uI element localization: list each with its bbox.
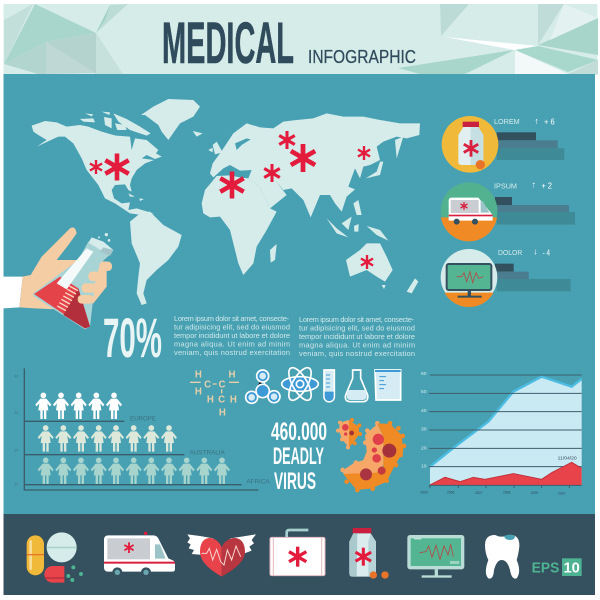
stat: ipsum: + 2 xyxy=(541,181,552,191)
flask liquid xyxy=(34,277,90,328)
text block 1: magna aliqua. Ut enim ad minim xyxy=(174,340,290,348)
map: South America xyxy=(130,212,182,305)
bottom icon bar xyxy=(4,514,595,595)
icon: chemical formula: H xyxy=(219,408,226,419)
map: Africa xyxy=(202,175,277,275)
text block 1: tur adipisicing elit, sed do eiusmod xyxy=(174,322,290,332)
flask cap xyxy=(88,237,113,256)
text block 1: tempor incididunt ut labore et dolore xyxy=(174,331,290,340)
flask highlight xyxy=(57,248,93,289)
flask body xyxy=(33,242,112,329)
icon: virus cells xyxy=(336,418,406,492)
bubbles xyxy=(105,233,108,236)
virus headline: VIRUS xyxy=(274,468,316,495)
icon: ambulance xyxy=(104,532,175,577)
grid lines xyxy=(429,375,582,467)
badge: EPS 10: 10 xyxy=(564,560,580,576)
y axis labels: 20 xyxy=(421,446,427,452)
y axis labels: 60 xyxy=(421,371,427,377)
icon: test tube xyxy=(324,370,334,402)
row: Australia people xyxy=(38,425,177,452)
text block 2: Lorem ipsum dolor sit amet, consecte- xyxy=(299,315,415,324)
stat: dolor: ↓ xyxy=(533,246,538,256)
y axis labels: 10 xyxy=(421,464,427,470)
x axis labels: 2006 xyxy=(447,491,455,495)
region labels: EUROPE xyxy=(130,416,157,423)
map: the Americas and Greenland xyxy=(32,99,223,216)
baseline xyxy=(429,485,582,488)
text block 1: veniam, quis nostrud exercitation xyxy=(174,348,290,357)
text block 1: Lorem ipsum dolor sit amet, consecte- xyxy=(174,314,290,323)
subtitle: INFOGRAPHIC: INFOGRAPHIC xyxy=(308,47,416,67)
text block 2: veniam, quis nostrud exercitation xyxy=(299,349,415,358)
icon: atom xyxy=(282,364,318,404)
map: Greenland xyxy=(141,99,200,140)
icon: chemical formula: C xyxy=(218,395,225,406)
x axis labels: 2007 xyxy=(475,491,483,495)
science icons row xyxy=(190,364,401,419)
row: Europe people xyxy=(35,392,122,419)
virus headline: 460.000 xyxy=(271,418,327,446)
axis labels xyxy=(14,374,18,486)
x axis labels: 2010 xyxy=(558,491,566,495)
people bar chart xyxy=(14,368,270,491)
map markers: red asterisks xyxy=(89,131,374,269)
large virus cell xyxy=(340,421,406,492)
axes and rows xyxy=(24,368,258,491)
icon: winged heart xyxy=(187,534,256,577)
map: Baltic sea xyxy=(235,138,251,150)
text block 2: tur adipisicing elit, sed do eiusmod xyxy=(299,324,415,332)
icon: medicine bottle xyxy=(349,528,389,579)
x axis labels: 2005 xyxy=(420,491,428,495)
small virus cell xyxy=(336,418,362,449)
region labels: AFRICA xyxy=(246,478,270,485)
badge: EPS 10: EPS xyxy=(532,561,560,577)
sleeve xyxy=(3,277,23,308)
axis labels: 40 xyxy=(14,374,18,378)
map: Arctic islands xyxy=(80,112,151,201)
map: North America xyxy=(32,121,162,216)
stat: dolor: DOLOR xyxy=(498,248,523,257)
map: Eurasia xyxy=(210,113,420,217)
region labels xyxy=(130,416,270,485)
axis labels: 20 xyxy=(14,448,18,452)
stat: dolor xyxy=(441,246,571,307)
text: MEDICAL xyxy=(162,11,294,76)
text block 1 xyxy=(174,314,290,357)
date label: 11/04/20 xyxy=(558,456,577,462)
stat: ipsum: ↑ xyxy=(532,180,536,190)
y axis labels: 40 xyxy=(421,408,427,414)
icon: chemical formula: H xyxy=(195,369,202,380)
stat: dolor: - 4 xyxy=(543,247,550,257)
badge: EPS 10 xyxy=(532,558,582,577)
hand xyxy=(19,227,107,310)
stat: lorem xyxy=(442,116,564,173)
header banner xyxy=(4,4,598,75)
icon: pills xyxy=(27,532,83,583)
virus headline: DEADLY xyxy=(273,443,324,470)
pale area series xyxy=(430,377,582,485)
icon: heart monitor xyxy=(407,535,464,578)
red area series xyxy=(430,462,582,485)
y axis labels: 50 xyxy=(421,389,427,395)
fingers xyxy=(78,262,112,304)
icon: chemical formula xyxy=(190,369,239,419)
icon: first aid case xyxy=(270,530,325,576)
virus headline xyxy=(271,418,327,495)
icon: chemical formula: H xyxy=(207,395,214,406)
text block 2 xyxy=(299,315,415,358)
map: Iceland xyxy=(193,131,203,137)
text block 2: magna aliqua. Ut enim ad minim xyxy=(299,340,415,350)
world map xyxy=(32,99,420,305)
icon: chemical formula: C xyxy=(219,380,226,391)
icon: molecule xyxy=(246,370,280,403)
x axis labels xyxy=(420,491,566,495)
text block 2: tempor incididunt ut labore et dolore xyxy=(299,332,415,341)
flask scale marks xyxy=(57,286,78,311)
hand holding flask xyxy=(3,227,113,329)
y axis labels: 30 xyxy=(421,426,427,432)
statistic 70%: 70% xyxy=(103,306,162,369)
map: UK and Ireland xyxy=(208,142,223,154)
stat: lorem: + 6 xyxy=(544,116,555,126)
map: Asia-Pacific islands xyxy=(270,137,418,293)
icon: beaker xyxy=(375,370,401,400)
main teal panel xyxy=(4,74,595,515)
row: Africa people xyxy=(38,457,230,484)
x axis labels: 2009 xyxy=(531,491,538,495)
icon: chemical formula: H xyxy=(229,369,236,380)
area chart xyxy=(420,371,582,495)
right stats xyxy=(441,116,575,307)
map: Australia xyxy=(346,243,393,282)
icon: flask xyxy=(345,370,368,402)
icon: tooth xyxy=(485,535,519,579)
axis labels: 10 xyxy=(14,482,18,486)
icon: chemical formula: H xyxy=(195,387,202,398)
stat: lorem: ↑ xyxy=(534,116,539,126)
stat: ipsum: IPSUM xyxy=(494,181,517,190)
y axis labels xyxy=(421,371,427,470)
stat: lorem: LOREM xyxy=(494,117,520,126)
region labels: AUSTRALIA xyxy=(190,449,225,456)
x axis labels: 2008 xyxy=(503,491,511,495)
stat: ipsum xyxy=(441,180,575,241)
blue line xyxy=(430,377,582,467)
icon: chemical formula: C xyxy=(204,380,211,391)
axis labels: 30 xyxy=(14,411,18,415)
icon: chemical formula: H xyxy=(230,395,237,406)
